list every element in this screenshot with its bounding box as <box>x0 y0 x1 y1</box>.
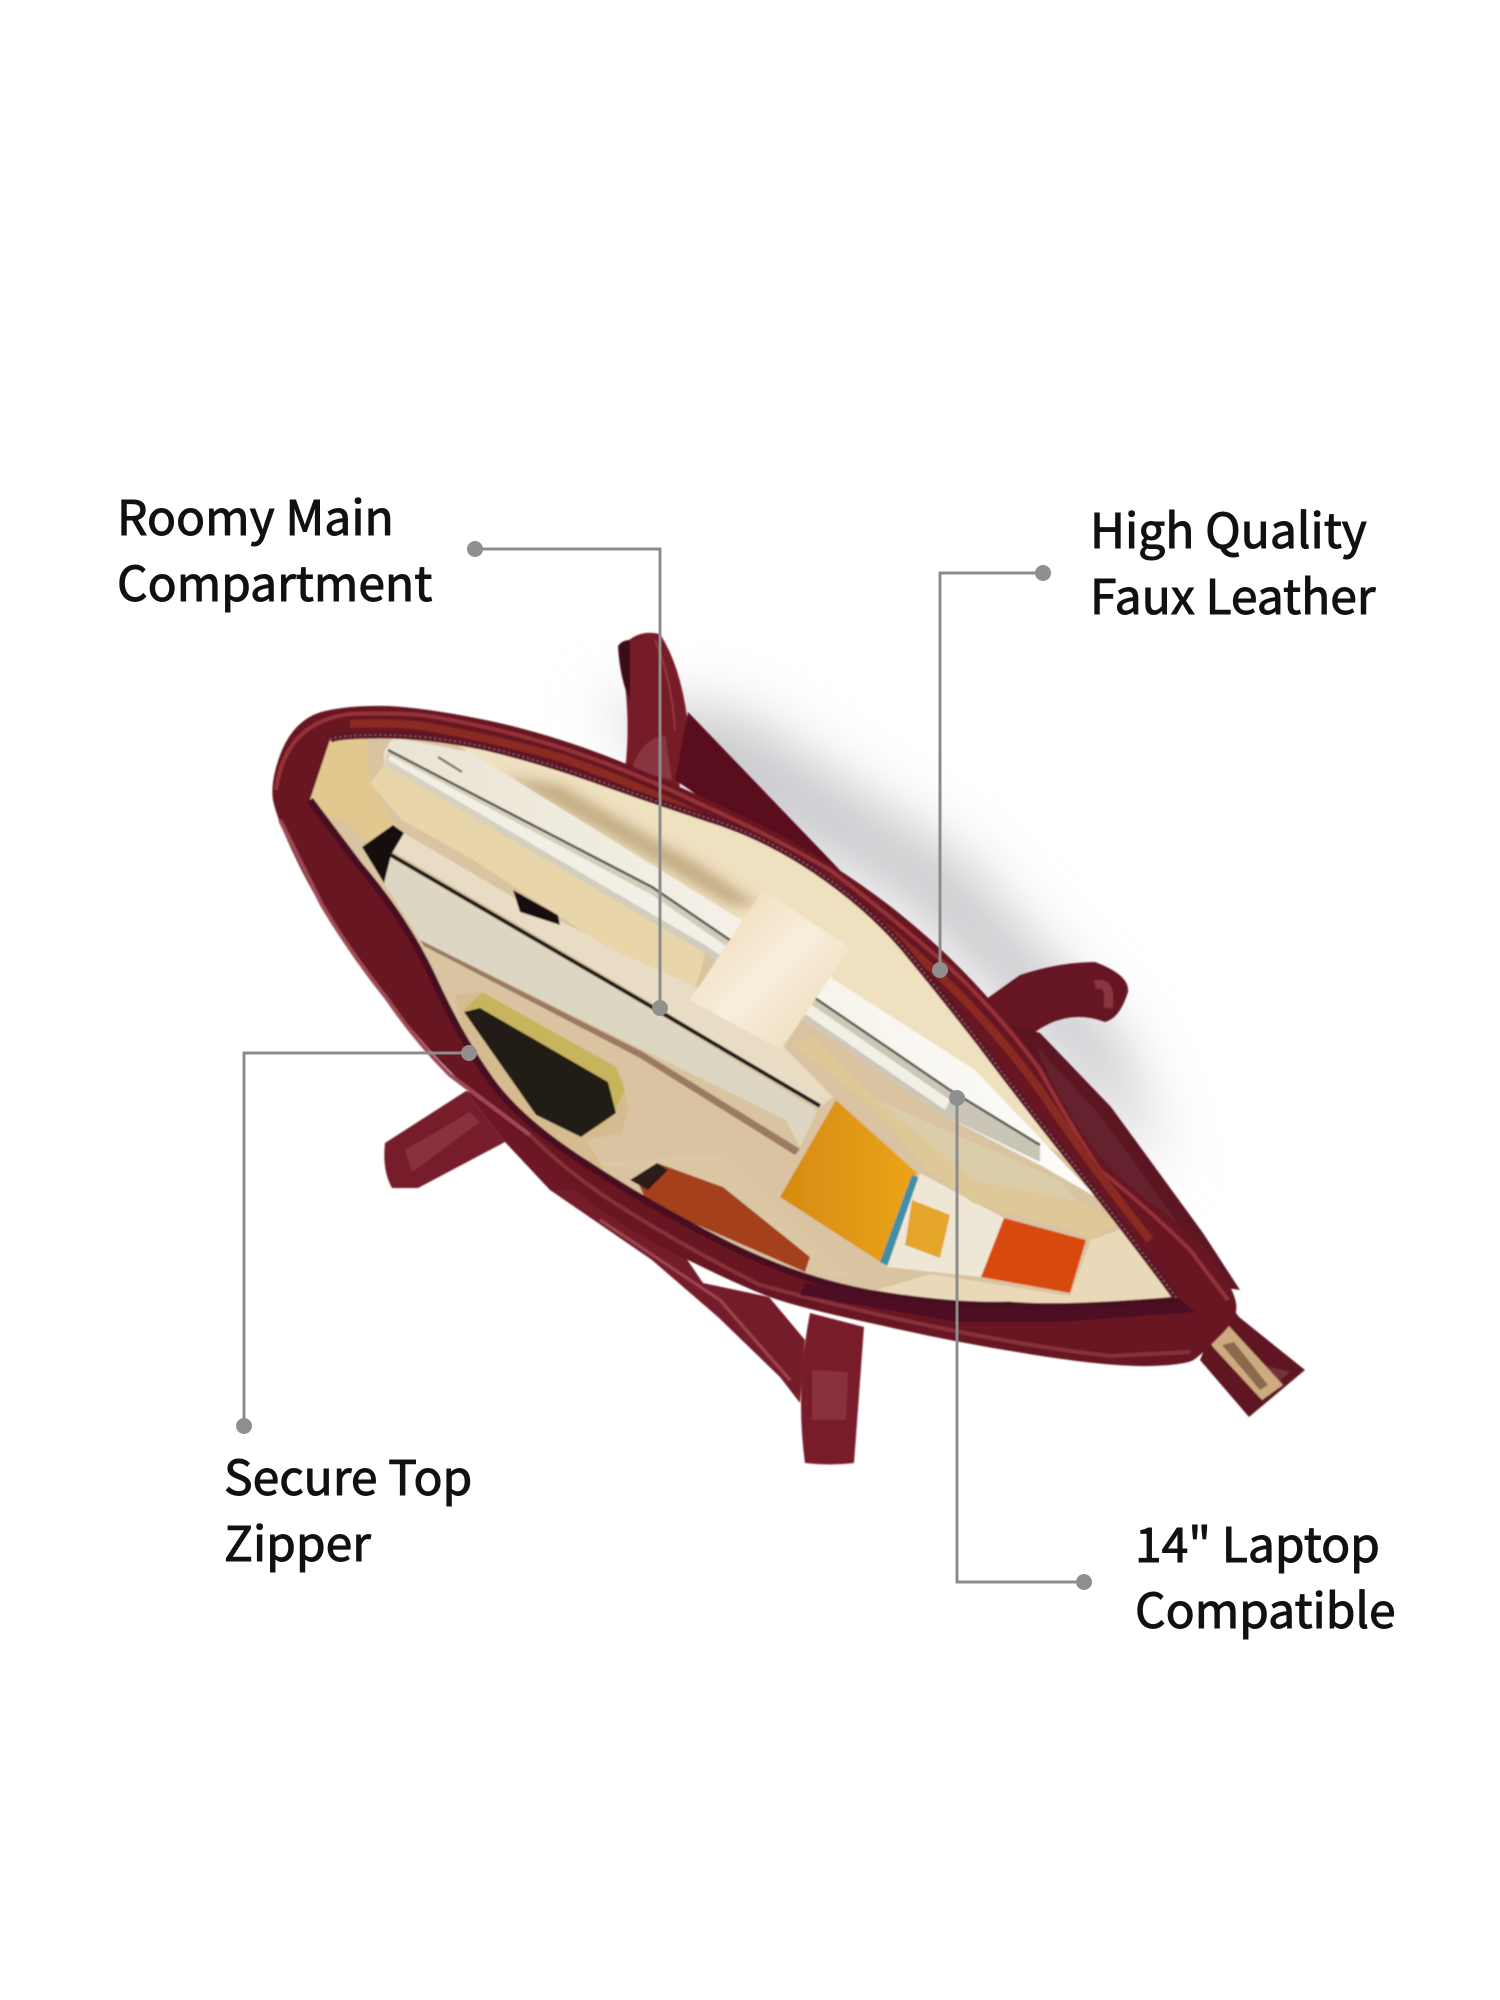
callout: high quality faux leather <box>932 492 1376 978</box>
callout: high quality faux leather: High Quality <box>1090 492 1367 562</box>
callout: 14 inch laptop compatible: 14" Laptop <box>1135 1506 1380 1576</box>
upper book <box>391 833 833 1107</box>
right strap loop <box>985 962 1128 1048</box>
callout: roomy main compartment: Roomy Main <box>117 479 394 549</box>
satin pad under laptop <box>370 765 705 987</box>
callout: 14 inch laptop compatible <box>949 1090 1396 1642</box>
callout: high quality faux leather: Faux Leather <box>1090 558 1376 628</box>
lining <box>310 737 1173 1299</box>
leader line <box>475 549 660 1008</box>
lower book <box>384 858 817 1155</box>
cream strap band <box>690 890 850 1050</box>
satin lump top left <box>310 738 396 842</box>
satin pad over bottle <box>876 1101 1115 1224</box>
lower pocket <box>630 1162 810 1273</box>
laptop <box>384 737 1096 1205</box>
bag interior <box>300 720 1200 1320</box>
bag rim <box>272 706 1236 1366</box>
leader line <box>244 1053 469 1426</box>
tote bag illustration <box>272 633 1305 1464</box>
phone pocket <box>455 992 629 1170</box>
callout: 14 inch laptop compatible: Compatible <box>1135 1572 1396 1642</box>
drop shadow behind bag <box>600 700 1165 1180</box>
zipper pull tab <box>1198 1298 1305 1417</box>
callout: secure top zipper <box>224 1045 477 1575</box>
callout: roomy main compartment <box>117 479 668 1016</box>
callout: roomy main compartment: Compartment <box>117 545 432 615</box>
back strap loop <box>618 633 960 1000</box>
back lining <box>460 745 1062 1155</box>
rim highlight stripes <box>276 713 1228 1356</box>
book gap shadow <box>391 855 820 1106</box>
leader line <box>940 573 1043 970</box>
callout: secure top zipper: Zipper <box>224 1505 371 1575</box>
back panel of bag <box>1000 1020 1240 1290</box>
leader line <box>957 1098 1084 1582</box>
infographic canvas <box>119 497 1394 1640</box>
left strap loop <box>384 1091 610 1210</box>
front strap <box>550 1190 864 1464</box>
phone <box>464 992 625 1130</box>
dark gaps <box>362 825 560 925</box>
zipper <box>310 735 1195 1322</box>
callout: secure top zipper: Secure Top <box>224 1439 472 1509</box>
bottom lining <box>878 1230 1170 1305</box>
bottle <box>780 1100 1086 1293</box>
